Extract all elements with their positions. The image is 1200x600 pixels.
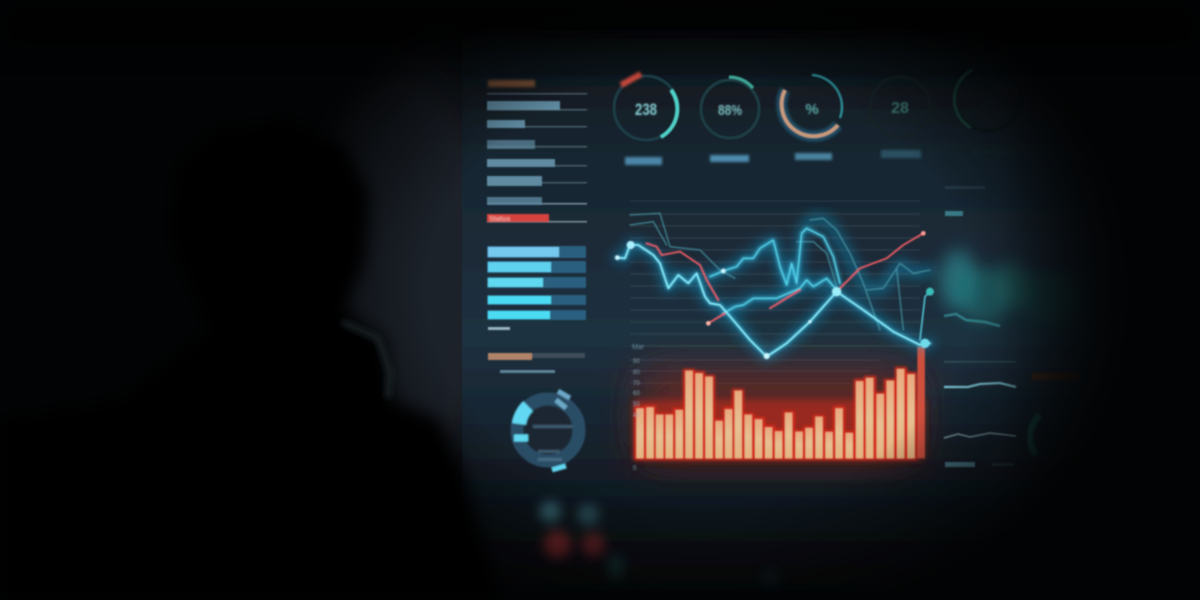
chart axis ticks: 80 bbox=[633, 370, 640, 376]
right column mini charts bbox=[944, 186, 1016, 467]
alert row bbox=[487, 214, 549, 222]
dashboard panel surface bbox=[462, 30, 1142, 590]
gauge 3 bbox=[782, 75, 842, 160]
chart axis ticks: 90 bbox=[633, 359, 640, 365]
list rows bbox=[487, 93, 587, 222]
cyan series wide glow bbox=[617, 218, 930, 357]
gauge 2 bbox=[701, 77, 759, 162]
right faint dial bbox=[1030, 415, 1040, 455]
left column: list panel bbox=[487, 80, 587, 223]
trace 2 bbox=[944, 433, 1016, 438]
gauge row bbox=[614, 65, 1021, 165]
line and bar chart grid bbox=[630, 201, 920, 383]
gauge 5 bbox=[954, 65, 1021, 155]
chart axis ticks: Mar bbox=[632, 344, 645, 351]
gauge 3: % bbox=[805, 101, 819, 118]
cyan series tight glow bbox=[617, 228, 930, 357]
gauge 1: 238 bbox=[635, 100, 657, 119]
faint teal series bbox=[630, 213, 930, 330]
dashboard content bbox=[487, 65, 1088, 588]
alert label: Status bbox=[489, 216, 510, 223]
bar chart bbox=[634, 347, 925, 460]
gauge 4: 28 bbox=[891, 100, 909, 117]
orange mini heading bbox=[1032, 373, 1078, 380]
gauge 2: 88% bbox=[718, 102, 742, 119]
wall glow behind silhouette bbox=[280, 40, 520, 500]
donut chart bbox=[514, 391, 579, 470]
gauge 5: 28 bbox=[980, 94, 996, 110]
list heading bbox=[488, 80, 535, 87]
chart axis ticks: 50 bbox=[633, 402, 640, 408]
red series bbox=[647, 233, 923, 323]
chart axis ticks: 0 bbox=[633, 466, 637, 472]
gauge 4 bbox=[870, 77, 930, 158]
teal trace under cloud bbox=[944, 314, 1000, 326]
chart nodes bbox=[615, 231, 934, 359]
bar chart wide haze bbox=[640, 370, 915, 460]
cyan series: secondary bbox=[710, 228, 932, 340]
chart axis ticks: 70 bbox=[633, 381, 640, 387]
face edge highlight bbox=[342, 322, 390, 398]
right edge fade bbox=[1000, 0, 1140, 600]
progress bars bbox=[487, 246, 586, 330]
chart axis ticks: 40 bbox=[633, 413, 640, 419]
cyan series: main bbox=[617, 245, 930, 357]
gauge 1 bbox=[614, 74, 678, 165]
person silhouette bbox=[0, 120, 500, 600]
chart axis ticks: 60 bbox=[633, 391, 640, 397]
trace 1 bbox=[944, 383, 1016, 387]
teal heat cloud bbox=[940, 250, 1088, 323]
blurred foreground lights bbox=[539, 501, 782, 588]
top shadow bbox=[0, 0, 1200, 50]
lower-left progress and label bbox=[488, 353, 585, 373]
line chart bbox=[615, 213, 934, 359]
chart axis ticks bbox=[632, 344, 645, 472]
